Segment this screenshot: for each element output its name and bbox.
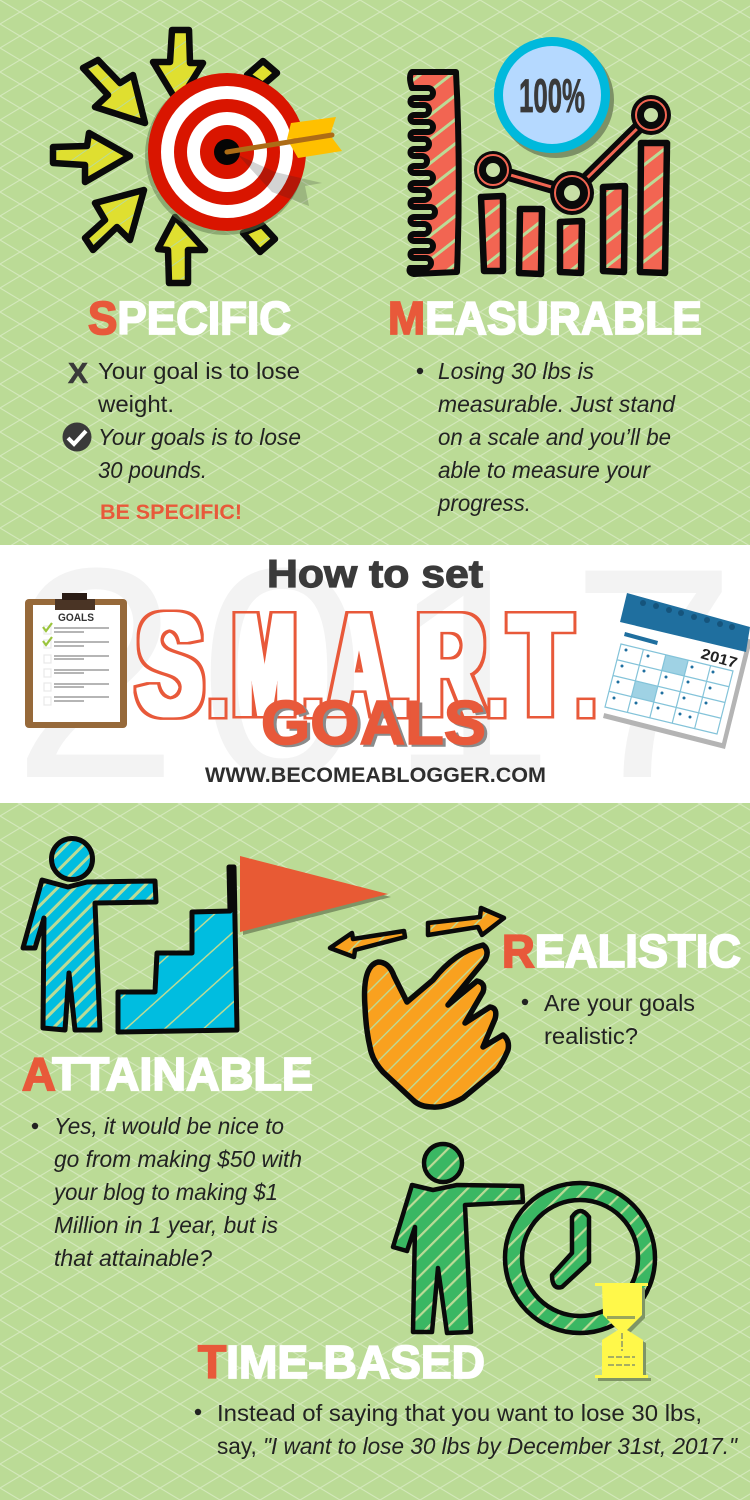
panel: realistic bbox=[330, 908, 741, 1107]
panel: specific bbox=[53, 30, 342, 524]
panel: measurable bbox=[388, 37, 702, 516]
text: wrong goal: weight. bbox=[97, 391, 174, 417]
text: measurable explanation: on a scale and you’ll be bbox=[438, 424, 671, 450]
text: realistic question: realistic? bbox=[544, 1023, 638, 1049]
callout: be specific: BE SPECIFIC! bbox=[100, 501, 242, 524]
title: S.M.A.R.T. outline letters bbox=[137, 583, 592, 746]
title: S.M.A.R.T. outline letters: . bbox=[212, 626, 224, 738]
text: attainable explanation: your blog to making $1 bbox=[52, 1179, 278, 1205]
text: right goal: 30 pounds. bbox=[98, 457, 207, 483]
title: S.M.A.R.T. outline letters: A bbox=[329, 583, 389, 746]
title: S.M.A.R.T. outline letters: . bbox=[307, 626, 319, 738]
text: time-based explanation: Instead of saying that you want to lose 30 lbs, bbox=[217, 1400, 702, 1426]
title: S.M.A.R.T. outline letters: M bbox=[234, 583, 295, 746]
text: time-based explanation bbox=[195, 1400, 739, 1459]
badge: 100%: 100% bbox=[519, 69, 585, 122]
text: right goal: Your goals is to lose bbox=[98, 424, 301, 450]
title: S.M.A.R.T. outline letters: . bbox=[394, 626, 406, 738]
text: wrong goal bbox=[97, 358, 300, 417]
icon: goals clipboard: GOALS bbox=[58, 612, 94, 624]
text: attainable explanation bbox=[32, 1113, 302, 1271]
line chart with nodes bbox=[474, 95, 671, 215]
icon: swiping hand bbox=[365, 945, 508, 1107]
icon: target with converging arrows bbox=[53, 30, 342, 283]
panel: attainable bbox=[22, 838, 391, 1271]
text: measurable explanation: able to measure your bbox=[438, 457, 651, 483]
icon: flag bbox=[240, 856, 391, 935]
icon: hourglass bbox=[595, 1283, 651, 1381]
icon: clock bbox=[505, 1183, 655, 1333]
panel: time-based bbox=[195, 1144, 739, 1459]
text: attainable explanation: that attainable? bbox=[54, 1245, 212, 1271]
title: S.M.A.R.T. outline letters: . bbox=[491, 626, 503, 738]
title: goals: GOALS bbox=[261, 689, 486, 758]
title: goals: GOALS bbox=[264, 691, 489, 760]
heading: time-based: TIME-BASED bbox=[198, 1336, 485, 1388]
title: S.M.A.R.T. outline letters: T bbox=[510, 583, 571, 746]
text: measurable explanation: progress. bbox=[437, 490, 531, 516]
icon: left arrow bbox=[330, 931, 405, 957]
text: attainable explanation: Yes, it would be nice to bbox=[54, 1113, 284, 1139]
text: attainable explanation: Million in 1 year, but is bbox=[54, 1212, 278, 1238]
text: website url: WWW.BECOMEABLOGGER.COM bbox=[205, 764, 546, 787]
text: realistic question bbox=[522, 990, 695, 1049]
text: realistic question: Are your goals bbox=[544, 990, 695, 1016]
watermark: 2017: 2017 bbox=[12, 505, 737, 841]
icon: ruler bbox=[410, 72, 459, 274]
text: attainable explanation: go from making $50 with bbox=[54, 1146, 302, 1172]
icon: X mark: X bbox=[68, 358, 89, 390]
title: S.M.A.R.T. outline letters: S bbox=[137, 583, 203, 746]
text: measurable explanation: measurable. Just stand bbox=[438, 391, 676, 417]
heading: attainable: ATTAINABLE bbox=[22, 1048, 313, 1100]
text: right goal bbox=[98, 424, 301, 483]
text: measurable explanation bbox=[417, 358, 676, 516]
title: how to set: How to set bbox=[267, 553, 483, 596]
panel: title band: . bbox=[580, 626, 592, 738]
icon: goals clipboard bbox=[25, 593, 127, 728]
icon: 2017 calendar: 2017 bbox=[699, 646, 739, 672]
icon: person pointing at clock bbox=[393, 1144, 523, 1333]
icon: check mark bbox=[62, 422, 92, 452]
icon: 2017 calendar bbox=[600, 593, 750, 749]
heading: realistic: REALISTIC bbox=[502, 925, 741, 977]
panel: title band bbox=[0, 505, 750, 841]
icon: person pointing bbox=[23, 838, 156, 1030]
text: measurable explanation: Losing 30 lbs is bbox=[438, 358, 594, 384]
icon: stairs bbox=[118, 867, 237, 1032]
text: wrong goal: Your goal is to lose bbox=[98, 358, 300, 384]
heading: specific: SPECIFIC bbox=[88, 292, 291, 344]
icon: right arrow bbox=[428, 908, 504, 935]
title: S.M.A.R.T. outline letters: R bbox=[417, 583, 485, 746]
text: time-based explanation: say, "I want to lose 30 lbs by December 31st, 2017." bbox=[217, 1433, 739, 1459]
heading: measurable: MEASURABLE bbox=[388, 292, 702, 344]
bar chart bbox=[481, 143, 667, 274]
badge: 100% bbox=[494, 37, 614, 158]
